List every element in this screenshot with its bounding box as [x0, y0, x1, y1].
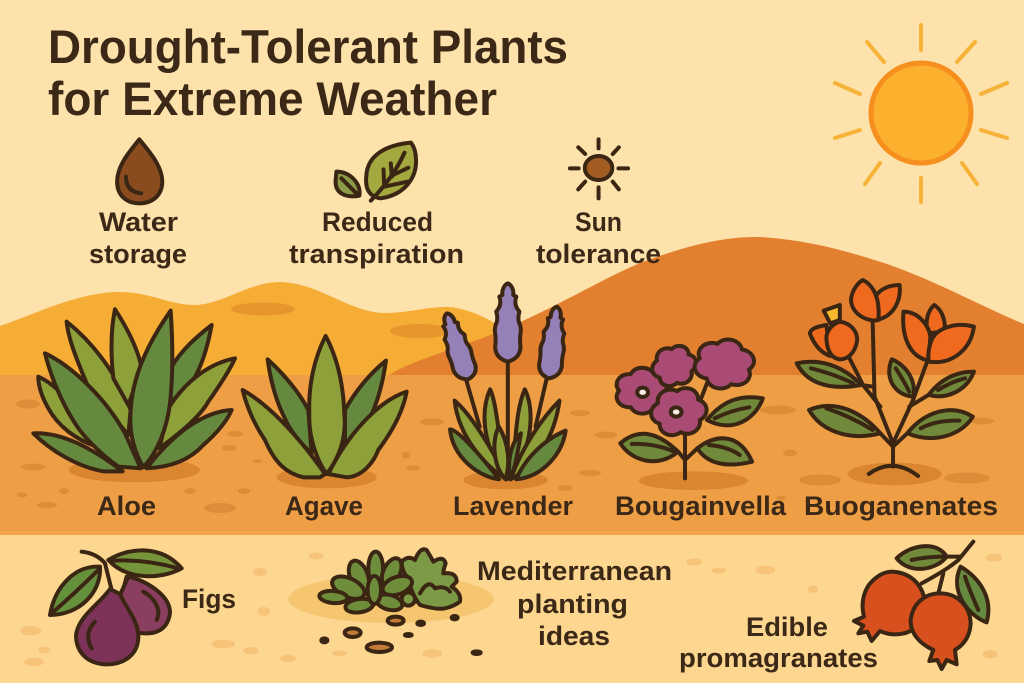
bottom strip [0, 535, 1024, 683]
label: bougainvella: Bougainvella [615, 491, 787, 521]
plant: bougainvillea [617, 334, 763, 490]
label: buoganenates: Buoganenates [804, 491, 998, 521]
label: water storage: Water [99, 207, 179, 237]
icon: leaves [336, 143, 416, 201]
label: sun tolerance: Sun [575, 207, 622, 237]
sun disc [871, 63, 971, 163]
bottom strip speckles [20, 553, 1002, 666]
label: mediterranean planting ideas [477, 556, 672, 651]
label: reduced transpiration: Reduced [322, 207, 433, 237]
red mountain [388, 237, 1024, 376]
big sun [835, 25, 1007, 202]
plant: aloe [33, 309, 235, 482]
label: reduced transpiration [289, 207, 464, 269]
desert ground [0, 375, 1024, 533]
icon: figs [50, 550, 182, 664]
label: edible pomegranates: promagranates [679, 643, 878, 673]
label: mediterranean planting ideas: Mediterranean [477, 556, 672, 586]
label: reduced transpiration: transpiration [289, 239, 464, 269]
label: lavender: Lavender [453, 491, 573, 521]
label: mediterranean planting ideas: ideas [538, 621, 610, 651]
label: aloe: Aloe [97, 491, 156, 521]
icon: mediterranean planting [288, 549, 494, 654]
ground speckles [16, 400, 994, 513]
icon: water drop [117, 139, 162, 203]
bottom strip divider [0, 531, 1024, 535]
dune shadow right [390, 324, 450, 338]
label: mediterranean planting ideas: planting [517, 589, 628, 619]
title: Drought-Tolerant Plants [48, 20, 568, 73]
label: figs: Figs [182, 584, 236, 614]
label: edible pomegranates [679, 612, 878, 673]
plant: flowering shrub [797, 280, 974, 485]
label: sun tolerance [536, 207, 661, 269]
icon: pomegranates [854, 542, 988, 669]
plant: lavender [436, 283, 568, 489]
label: agave: Agave [285, 491, 363, 521]
dune shadow [231, 302, 295, 316]
label: sun tolerance: tolerance [536, 239, 661, 269]
label: edible pomegranates: Edible [746, 612, 828, 642]
title [48, 20, 568, 125]
sand dunes [0, 282, 520, 376]
title: for Extreme Weather [48, 72, 497, 125]
label: water storage [89, 207, 187, 269]
sun rays [835, 25, 1007, 202]
plant: agave [243, 336, 407, 488]
icon: small sun [570, 139, 628, 198]
label: water storage: storage [89, 239, 187, 269]
